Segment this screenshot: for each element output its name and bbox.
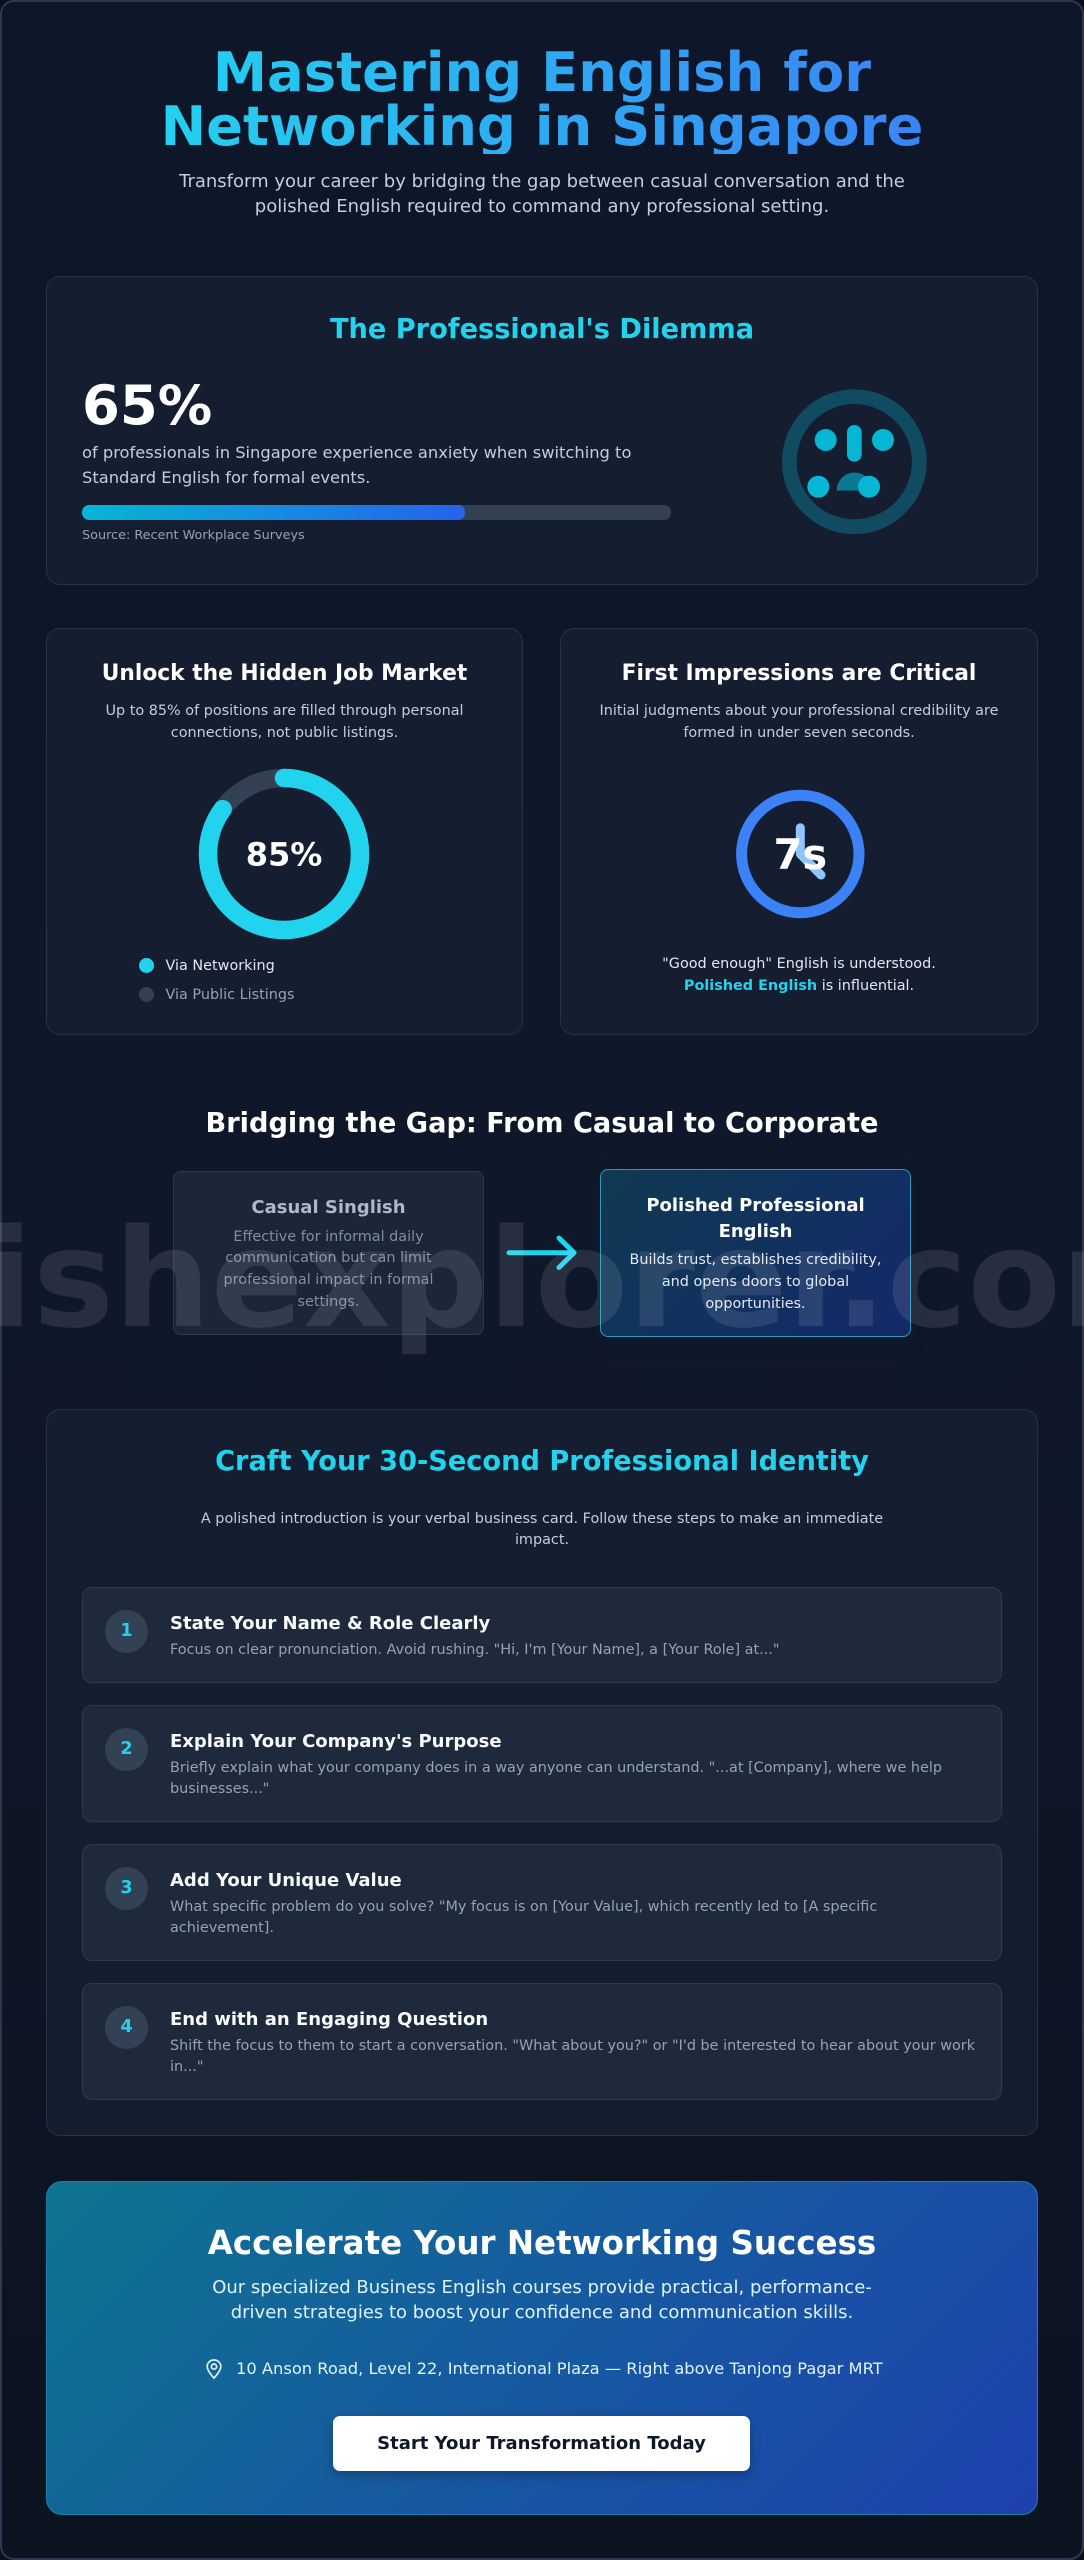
text: call to action description — [212, 2276, 872, 2323]
legend: via public listings: Via Public Listings — [166, 986, 294, 1002]
text: casual description: professional impact in formal — [224, 1272, 433, 1288]
text: anxiety description: Standard English for formal events. — [82, 468, 370, 487]
step number 4: 4 — [120, 2017, 133, 2037]
heading: call to action: Accelerate Your Networking Success — [208, 2224, 876, 2262]
heading: polished professional english: English — [719, 1220, 792, 1242]
icon: seven second clock: 7s — [773, 830, 827, 879]
step number 3 — [105, 1867, 148, 1910]
address line — [206, 2358, 883, 2380]
text: anxiety description — [82, 443, 631, 487]
text: identity intro: impact. — [515, 1532, 569, 1548]
step title 3: Add Your Unique Value — [170, 1870, 402, 1890]
title: Mastering English for — [213, 40, 871, 104]
step 2 — [82, 1705, 1002, 1822]
step title 1: State Your Name & Role Clearly — [170, 1612, 490, 1634]
step text 4: in..." — [170, 2059, 203, 2075]
icon: map pin — [206, 2359, 222, 2380]
step title 4: End with an Engaging Question — [170, 2008, 488, 2030]
source note: Source: Recent Workplace Surveys — [82, 528, 305, 543]
panel: the professional's dilemma — [46, 276, 1038, 585]
text: good enough vs polished — [662, 956, 936, 994]
step text 4 — [170, 2038, 975, 2075]
legend: via networking: Via Networking — [166, 958, 275, 974]
text: casual description: Effective for informal daily — [233, 1228, 424, 1244]
text: polished description — [629, 1252, 882, 1312]
subtitle: polished English required to command any professional setting. — [255, 196, 829, 217]
step text 2 — [170, 1760, 942, 1797]
text: polished description: Builds trust, establishes credibility, — [629, 1252, 882, 1268]
step text 1: Focus on clear pronunciation. Avoid rushing. "Hi, I'm [Your Name], a [Your Role] at..." — [170, 1642, 779, 1658]
icon: seven second clock — [736, 790, 864, 918]
text: hidden market description — [105, 703, 464, 741]
icon: anxious speaker — [782, 389, 927, 534]
panel: first impressions — [560, 628, 1038, 1035]
text: good enough vs polished: Polished English is influential. — [684, 978, 914, 994]
step text 2: businesses..." — [170, 1781, 269, 1797]
text: identity intro — [201, 1510, 883, 1548]
text: call to action description: driven strategies to boost your confidence and communication skills. — [231, 2302, 853, 2323]
step number 2: 2 — [120, 1739, 133, 1759]
text: hidden market description: connections, not public listings. — [171, 725, 398, 741]
step text 4: Shift the focus to them to start a conversation. "What about you?" or "I'd be interested to hear about your work — [170, 2038, 975, 2054]
text: hidden market description: Up to 85% of positions are filled through personal — [105, 703, 464, 719]
step 1 — [82, 1587, 1002, 1683]
donut chart: 85% — [198, 768, 370, 940]
text: call to action description: Our specialized Business English courses provide practical, performance- — [212, 2276, 872, 2298]
title: Networking in Singapore — [161, 94, 923, 158]
progress bar: 65% — [82, 505, 671, 520]
card: casual singlish — [173, 1171, 484, 1335]
step number 1 — [105, 1610, 148, 1653]
heading: bridging the gap: Bridging the Gap: From Casual to Corporate — [206, 1108, 878, 1139]
heading: professional identity: Craft Your 30-Second Professional Identity — [215, 1446, 869, 1477]
heading: polished professional english — [646, 1194, 865, 1242]
card: polished professional english — [600, 1169, 911, 1337]
step text 3: What specific problem do you solve? "My focus is on [Your Value], which recently led to [A specific — [170, 1898, 877, 1914]
heading: first impressions: First Impressions are Critical — [622, 661, 976, 686]
subtitle: Transform your career by bridging the gap between casual conversation and the — [179, 171, 905, 192]
donut chart: 85%: 85% — [246, 836, 322, 874]
text: casual description — [224, 1228, 433, 1310]
step text 3 — [170, 1898, 877, 1936]
button: start your transformation — [333, 2416, 750, 2471]
text: address: 10 Anson Road, Level 22, International Plaza — Right above Tanjong Pagar MRT — [236, 2358, 883, 2378]
step number 4 — [105, 2006, 148, 2049]
text: identity intro: A polished introduction is your verbal business card. Follow these steps to make an immediate — [201, 1510, 883, 1526]
step number 1: 1 — [120, 1621, 133, 1641]
step 4 — [82, 1983, 1002, 2100]
heading: hidden job market: Unlock the Hidden Job Market — [102, 661, 467, 686]
statistic: 65%: 65% — [82, 374, 212, 437]
heading: dilemma: The Professional's Dilemma — [330, 314, 754, 345]
panel: call to action — [46, 2181, 1038, 2515]
text: good enough vs polished: "Good enough" English is understood. — [662, 956, 936, 972]
title — [142, 46, 942, 154]
step number 3: 3 — [120, 1878, 133, 1898]
text: polished description: opportunities. — [705, 1296, 806, 1312]
step text 2: Briefly explain what your company does in a way anyone can understand. "...at [Company], where we help — [170, 1760, 942, 1776]
button: start your transformation: Start Your Transformation Today — [377, 2433, 706, 2454]
text: casual description: communication but can limit — [225, 1250, 432, 1266]
heading: casual singlish: Casual Singlish — [251, 1196, 406, 1218]
text: anxiety description: of professionals in Singapore experience anxiety when switching to — [82, 443, 631, 462]
text: polished description: and opens doors to global — [662, 1274, 849, 1290]
step number 2 — [105, 1728, 148, 1771]
text: first impressions description: Initial judgments about your professional credibility are — [600, 703, 998, 719]
step title 2: Explain Your Company's Purpose — [170, 1730, 502, 1752]
subtitle — [179, 171, 905, 217]
step text 3: achievement]. — [170, 1920, 274, 1936]
panel: hidden job market — [46, 628, 523, 1035]
heading: polished professional english: Polished Professional — [646, 1194, 865, 1216]
text: casual description: settings. — [298, 1294, 359, 1310]
panel: 30-second professional identity — [46, 1409, 1038, 2136]
text: first impressions description: formed in under seven seconds. — [683, 725, 915, 741]
arrow: casual to polished — [506, 1236, 576, 1270]
step 3 — [82, 1844, 1002, 1961]
text: first impressions description — [600, 703, 998, 741]
